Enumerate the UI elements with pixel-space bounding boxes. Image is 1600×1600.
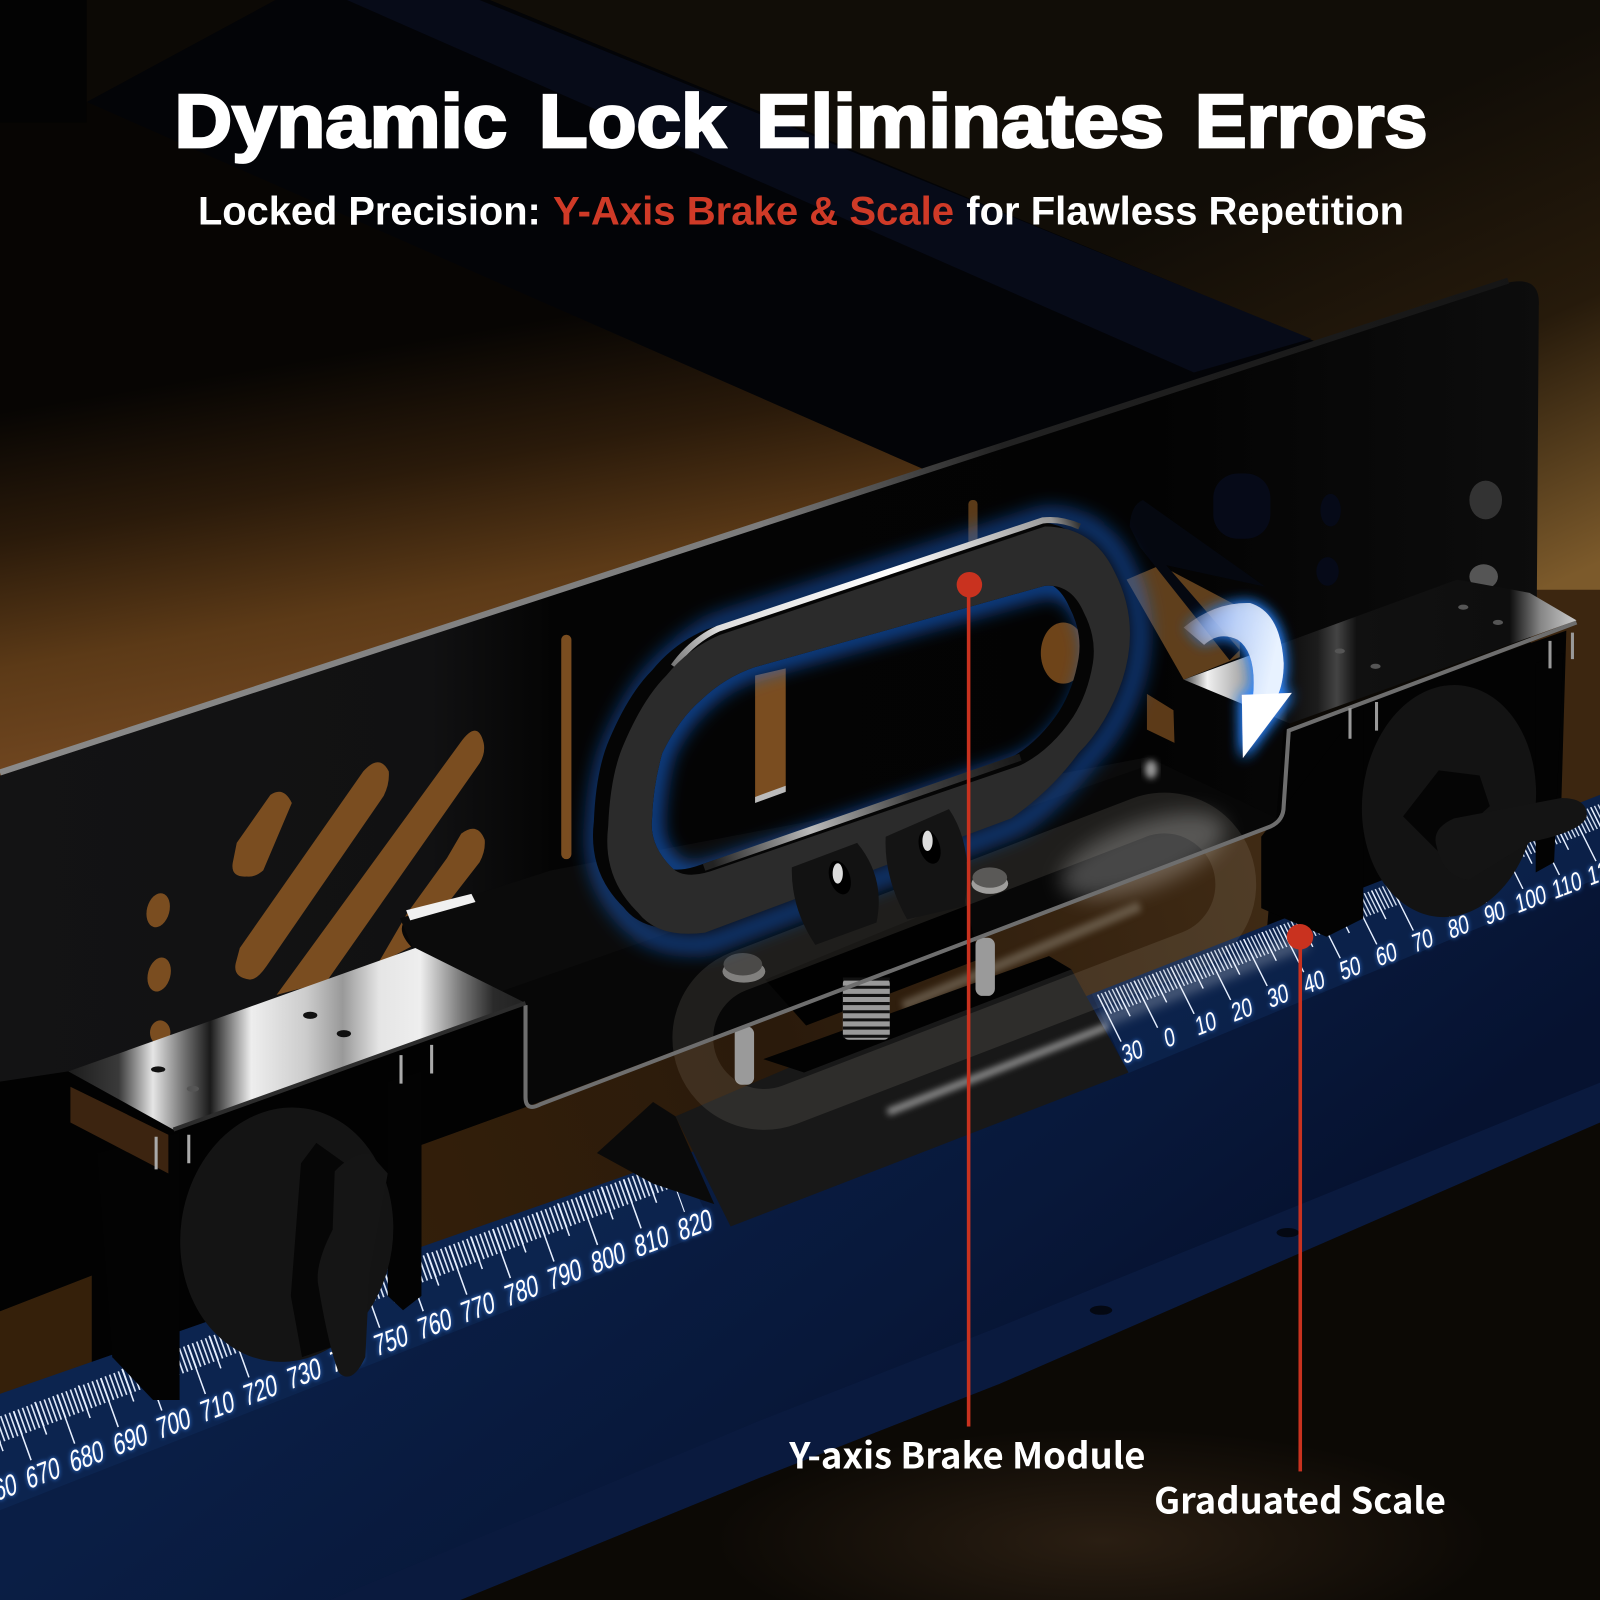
- brake block highlight: [888, 1027, 1107, 1112]
- rail hole: [1277, 1228, 1299, 1237]
- left bracket legs: [97, 1071, 421, 1400]
- brake block wedge: [597, 1102, 714, 1204]
- scale numbers right: 70: [1410, 922, 1435, 959]
- reflection over scale: [1092, 941, 1306, 1024]
- plate underside: [70, 1087, 168, 1173]
- floor glow: [714, 1429, 1490, 1600]
- slot: longest diagonal: [277, 731, 484, 995]
- knob arm: [1435, 798, 1587, 880]
- lower right wood wall: [1531, 590, 1600, 816]
- left panel cutouts: [143, 635, 571, 1045]
- scale numbers left: 720: [241, 1367, 280, 1413]
- barrel hole: [915, 827, 945, 867]
- bracket edge outline: [526, 622, 1577, 1107]
- subtitle: [198, 189, 1404, 233]
- hinge: [792, 809, 967, 945]
- screw right: [971, 867, 1008, 894]
- subtitle tail: for Flawless Repetition: [966, 189, 1404, 233]
- brake block: [676, 956, 1129, 1227]
- callout dot: [1287, 924, 1313, 949]
- top vertical slot: [968, 500, 978, 546]
- leg outer: [1536, 653, 1563, 872]
- wood below bracket: [0, 816, 1347, 1480]
- scale numbers left: 750: [371, 1317, 410, 1364]
- barrel pin: [922, 831, 933, 851]
- scale numbers left: 810: [632, 1218, 671, 1264]
- scale numbers right: 100: [1513, 878, 1549, 919]
- hole: [143, 891, 173, 930]
- ghost flat plate: [672, 792, 1257, 1130]
- knob disc: [1351, 676, 1547, 926]
- arrow arc: [1184, 603, 1284, 698]
- plate surface: [1184, 580, 1577, 723]
- frame rail blue strip: [347, 0, 1311, 372]
- panel behind ring hole: [652, 586, 1094, 875]
- panel big hole: [1213, 473, 1270, 539]
- hole: [144, 955, 175, 994]
- scale ticks left: [0, 1170, 687, 1453]
- blue rail: [0, 795, 1600, 1600]
- scale numbers right: 0: [1162, 1021, 1178, 1053]
- right diagonal navy slot: [1130, 500, 1265, 660]
- knob recess: [1403, 770, 1490, 852]
- rail hole: [1090, 1306, 1112, 1315]
- scale band left: [0, 1157, 714, 1510]
- scale numbers left: 760: [415, 1300, 454, 1347]
- scale ticks right: [1102, 796, 1600, 1018]
- slot: long diagonal: [235, 762, 389, 980]
- plate hole: [1458, 605, 1468, 610]
- wood sheen streak: [903, 906, 1140, 1006]
- scale numbers right: 90: [1482, 894, 1508, 931]
- left knob: [164, 1094, 410, 1377]
- scale numbers right: 30: [1119, 1033, 1145, 1070]
- callout line: [1298, 937, 1302, 1471]
- plate hole: [1335, 648, 1345, 654]
- main black panel: [0, 281, 1539, 1429]
- rail body: [0, 795, 1600, 1600]
- right top plate: [1184, 580, 1577, 739]
- plate clip: [1550, 633, 1572, 668]
- screw head: [972, 867, 1007, 888]
- scale numbers right: 30: [1265, 977, 1291, 1014]
- panel hole: [1320, 494, 1341, 527]
- ring top highlight: [673, 520, 1080, 666]
- barrel lower: [792, 843, 879, 945]
- callout label: Y-axis Brake Module: [788, 1428, 1145, 1479]
- scale numbers right: 110: [1550, 865, 1584, 905]
- plate clip: [401, 1045, 432, 1084]
- panel screw: [1469, 481, 1502, 519]
- scale numbers right: 40: [1301, 963, 1327, 1000]
- dark frame rail: [87, 0, 1316, 469]
- guide pin left: [735, 1027, 754, 1085]
- five mm ticks: [1122, 800, 1600, 1002]
- scale numbers left: 700: [154, 1400, 193, 1446]
- plate hole: [187, 1086, 199, 1092]
- outer blue glow: [596, 516, 1140, 945]
- left top plate: [68, 948, 526, 1173]
- scale numbers right: 80: [1446, 908, 1471, 945]
- panel top edge: [0, 281, 1508, 772]
- subtitle highlight: Y-Axis Brake & Scale: [553, 189, 954, 233]
- scale numbers left: 790: [545, 1251, 584, 1298]
- scale numbers right: 50: [1337, 950, 1363, 986]
- leg outer: [97, 1133, 180, 1400]
- scale numbers left: 670: [23, 1449, 62, 1496]
- scale band right: [1092, 795, 1600, 1073]
- callout: graduated scale: [1154, 924, 1446, 1524]
- screw left: [722, 953, 765, 983]
- screw body: [971, 873, 1008, 894]
- flange bright corner: [1145, 760, 1157, 779]
- screw body: [722, 960, 765, 983]
- right knob: [1351, 676, 1587, 926]
- slot: short diagonal: [232, 792, 292, 877]
- black area under hinge: [765, 898, 980, 1026]
- scale numbers left: 740: [327, 1334, 367, 1380]
- title word: Errors: [1195, 80, 1428, 164]
- scale numbers left: [0, 1201, 715, 1512]
- bracket flange: [402, 757, 1284, 1107]
- title word: Lock: [539, 80, 727, 164]
- hole seen through ring: [1040, 622, 1080, 684]
- callout: Y-axis brake module: [788, 572, 1145, 1479]
- knob disc: [164, 1094, 410, 1376]
- five mm ticks: [0, 1178, 673, 1435]
- scale numbers left: 800: [589, 1234, 628, 1281]
- plate hole: [337, 1030, 351, 1037]
- scale numbers left: 770: [458, 1284, 497, 1331]
- plate hole: [151, 1066, 165, 1072]
- barrel upper: [886, 809, 967, 919]
- vertical slot: [561, 635, 571, 859]
- flange glint: [406, 894, 476, 920]
- title word: Eliminates: [756, 80, 1164, 164]
- callout line: [967, 585, 970, 1427]
- right bracket legs: [1261, 653, 1563, 937]
- title: [174, 80, 1428, 164]
- right wood window bottom: [1147, 694, 1174, 743]
- black area under left plate: [0, 1005, 526, 1429]
- panel hole: [1316, 557, 1339, 586]
- callout dot: [957, 572, 982, 597]
- leg inner: [1261, 704, 1363, 937]
- flange rear bar: [400, 757, 1148, 992]
- slot seen through ring: [755, 668, 786, 802]
- handle ring: [593, 516, 1140, 945]
- inner blue glow: [652, 586, 1094, 875]
- plate front edge: [173, 1003, 526, 1130]
- scale numbers left: 820: [675, 1201, 715, 1248]
- spring body: [843, 978, 890, 1040]
- slot end glint: [755, 786, 786, 803]
- scale numbers left: 690: [111, 1416, 150, 1463]
- arrow head: [1242, 693, 1292, 758]
- scale numbers left: 780: [502, 1267, 541, 1314]
- ring back thickness: [593, 521, 1116, 929]
- ten mm ticks: [0, 1187, 676, 1453]
- screw head: [723, 953, 762, 976]
- knob recess: [291, 1143, 352, 1357]
- plate hole: [303, 1012, 317, 1019]
- subtitle lead: Locked Precision:: [198, 189, 541, 233]
- spring coils: [843, 978, 889, 1040]
- spring: [843, 978, 890, 1040]
- rotation arrow: [1184, 603, 1292, 758]
- rail front lip: [330, 1083, 1600, 1600]
- knob tongue: [318, 1153, 388, 1377]
- flange sheen: [1050, 795, 1236, 915]
- plate clip: [1350, 702, 1377, 739]
- left wood table: [0, 102, 929, 781]
- right wood window: [1127, 565, 1240, 680]
- scale numbers left: 680: [67, 1433, 106, 1479]
- leg inner: [388, 1071, 421, 1310]
- plate hole: [1493, 620, 1503, 625]
- panel screw: [1469, 564, 1498, 589]
- ring front face: [607, 527, 1130, 934]
- ring inner lower highlight: [704, 757, 1020, 867]
- scale numbers right: 20: [1229, 991, 1255, 1028]
- scale numbers right: [1119, 851, 1600, 1070]
- right bracket underside: [1265, 631, 1566, 949]
- upper right wood table: [490, 0, 1600, 612]
- callout label: Graduated Scale: [1154, 1473, 1446, 1524]
- barrel hole: [825, 858, 855, 897]
- plate clip: [156, 1135, 189, 1169]
- brake block slit: [763, 956, 1071, 1072]
- guide pin right: [976, 938, 995, 996]
- plate hole: [1370, 664, 1381, 669]
- hole: [150, 1020, 170, 1045]
- scale numbers right: 60: [1373, 936, 1399, 972]
- scale numbers left: 730: [284, 1350, 324, 1397]
- corner post: [0, 0, 87, 122]
- plate surface: [68, 948, 526, 1130]
- title word: Dynamic: [174, 80, 507, 164]
- scale numbers left: 710: [198, 1383, 237, 1430]
- ten mm ticks: [1109, 809, 1600, 1018]
- scale numbers right: 10: [1193, 1005, 1219, 1041]
- fine ticks: [1102, 796, 1600, 1005]
- fine ticks: [0, 1170, 683, 1440]
- barrel pin: [833, 863, 843, 884]
- slot: lower diagonal: [378, 829, 485, 964]
